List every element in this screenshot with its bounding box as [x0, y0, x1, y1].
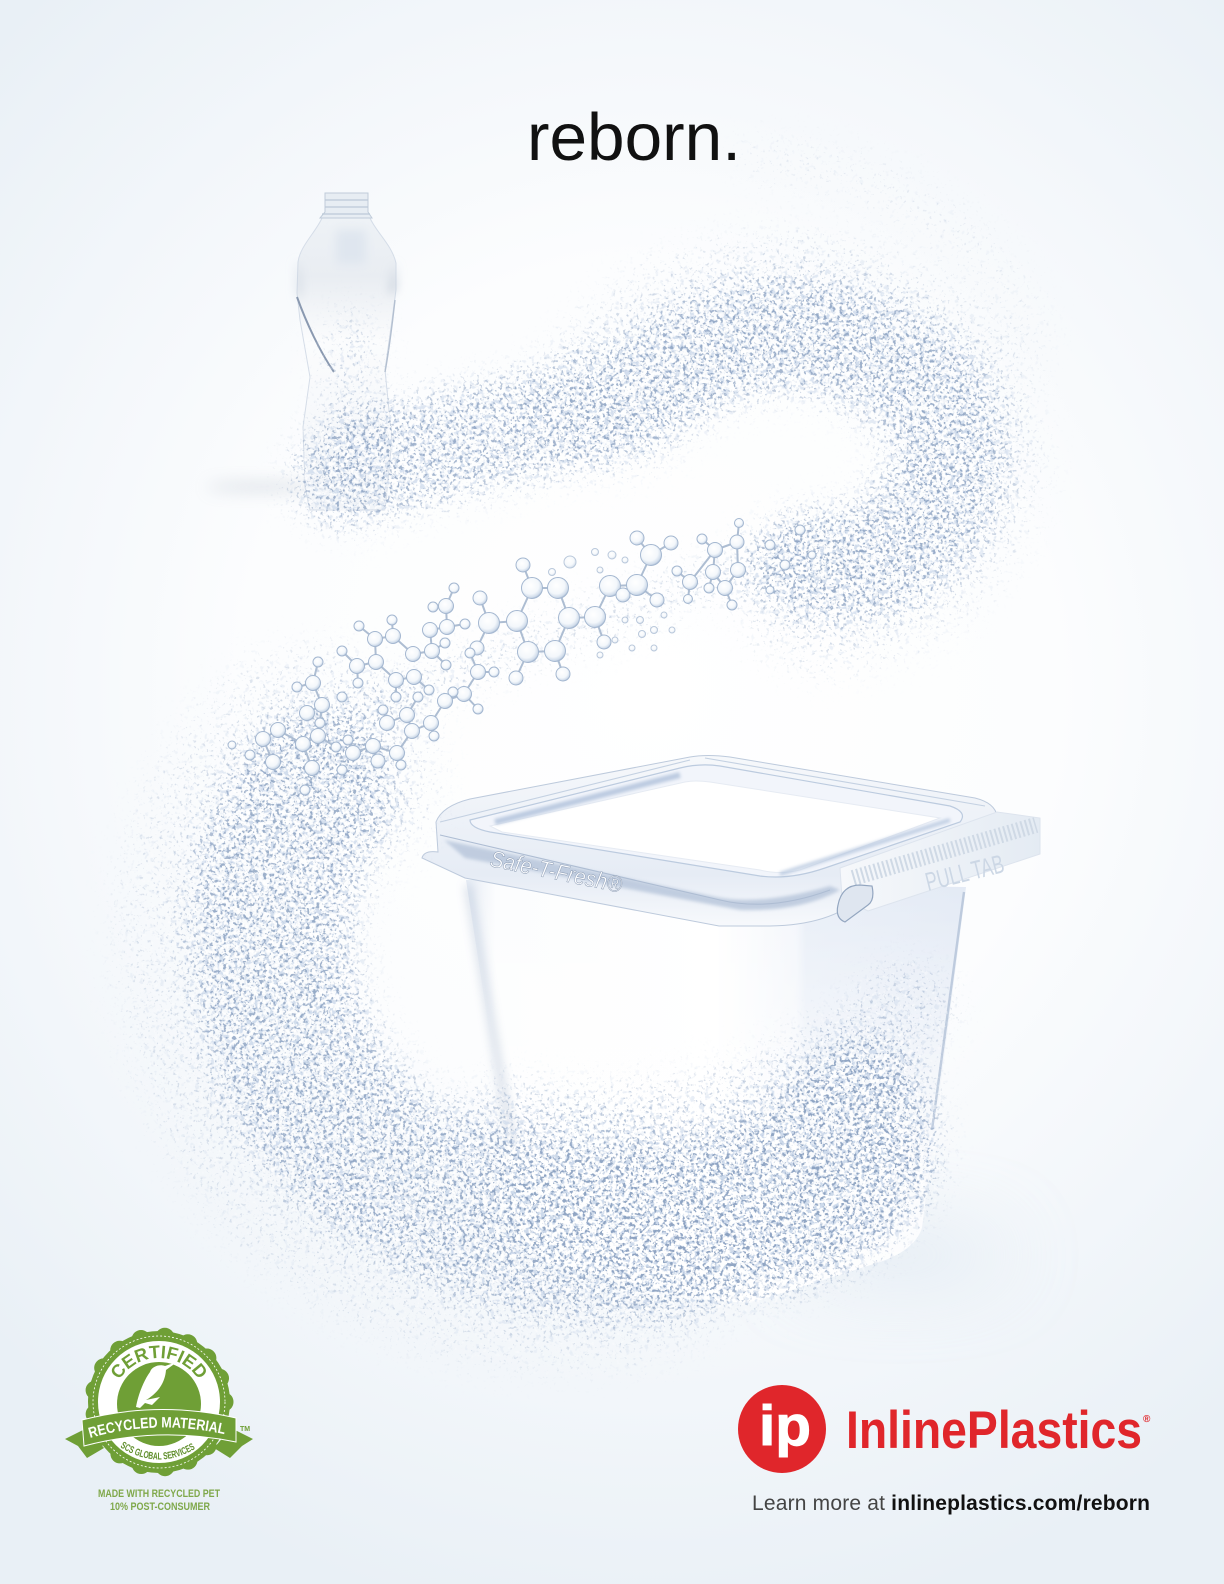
- badge seal: [88, 1331, 230, 1473]
- ribbon: [65, 1428, 253, 1458]
- logo wordmark: InlinePlastics: [846, 1401, 1142, 1460]
- recycled content text: MADE WITH RECYCLED PET: [98, 1488, 220, 1500]
- trademark: TM: [240, 1426, 250, 1433]
- atoms: central molecule: [470, 531, 678, 685]
- plastic bottle: [297, 193, 396, 510]
- atoms: right molecules: [672, 518, 816, 610]
- lid recess: [470, 765, 962, 877]
- logo circle: [738, 1385, 826, 1473]
- call to action: Learn more at inlineplastics.com/reborn: [752, 1492, 1150, 1515]
- atoms: faint background molecules: [548, 548, 675, 658]
- logo monogram: ip: [759, 1394, 811, 1458]
- pull tab label: PULL TAB: [922, 848, 1007, 897]
- bottle shadow: [207, 484, 317, 490]
- container shadow: [790, 1233, 1010, 1277]
- molecule chain: [228, 518, 816, 795]
- pull tab: [837, 812, 1040, 922]
- lid front band: [444, 840, 840, 910]
- food container: [422, 756, 1040, 1302]
- inline plastics logo: [738, 1385, 1151, 1473]
- container body: [466, 880, 966, 1302]
- certified arc text: CERTIFIED: [112, 1345, 206, 1378]
- title: reborn.: [527, 100, 741, 175]
- ribbon text: RECYCLED MATERIAL: [88, 1417, 224, 1438]
- bird: [136, 1362, 177, 1408]
- certified recycled material badge: 10% POST-CONSUMER: [110, 1501, 210, 1513]
- inline plastics logo: ®: [1143, 1414, 1151, 1425]
- particle stream: [243, 160, 1030, 1265]
- scs global services text: SCS GLOBAL SERVICES: [120, 1442, 195, 1460]
- embossed brand: Safe-T-Fresh®: [488, 845, 625, 898]
- atoms: left molecules: [228, 583, 499, 795]
- certified recycled material badge: [65, 1328, 253, 1513]
- lid rim: [422, 756, 997, 926]
- tab tongue: [837, 885, 873, 922]
